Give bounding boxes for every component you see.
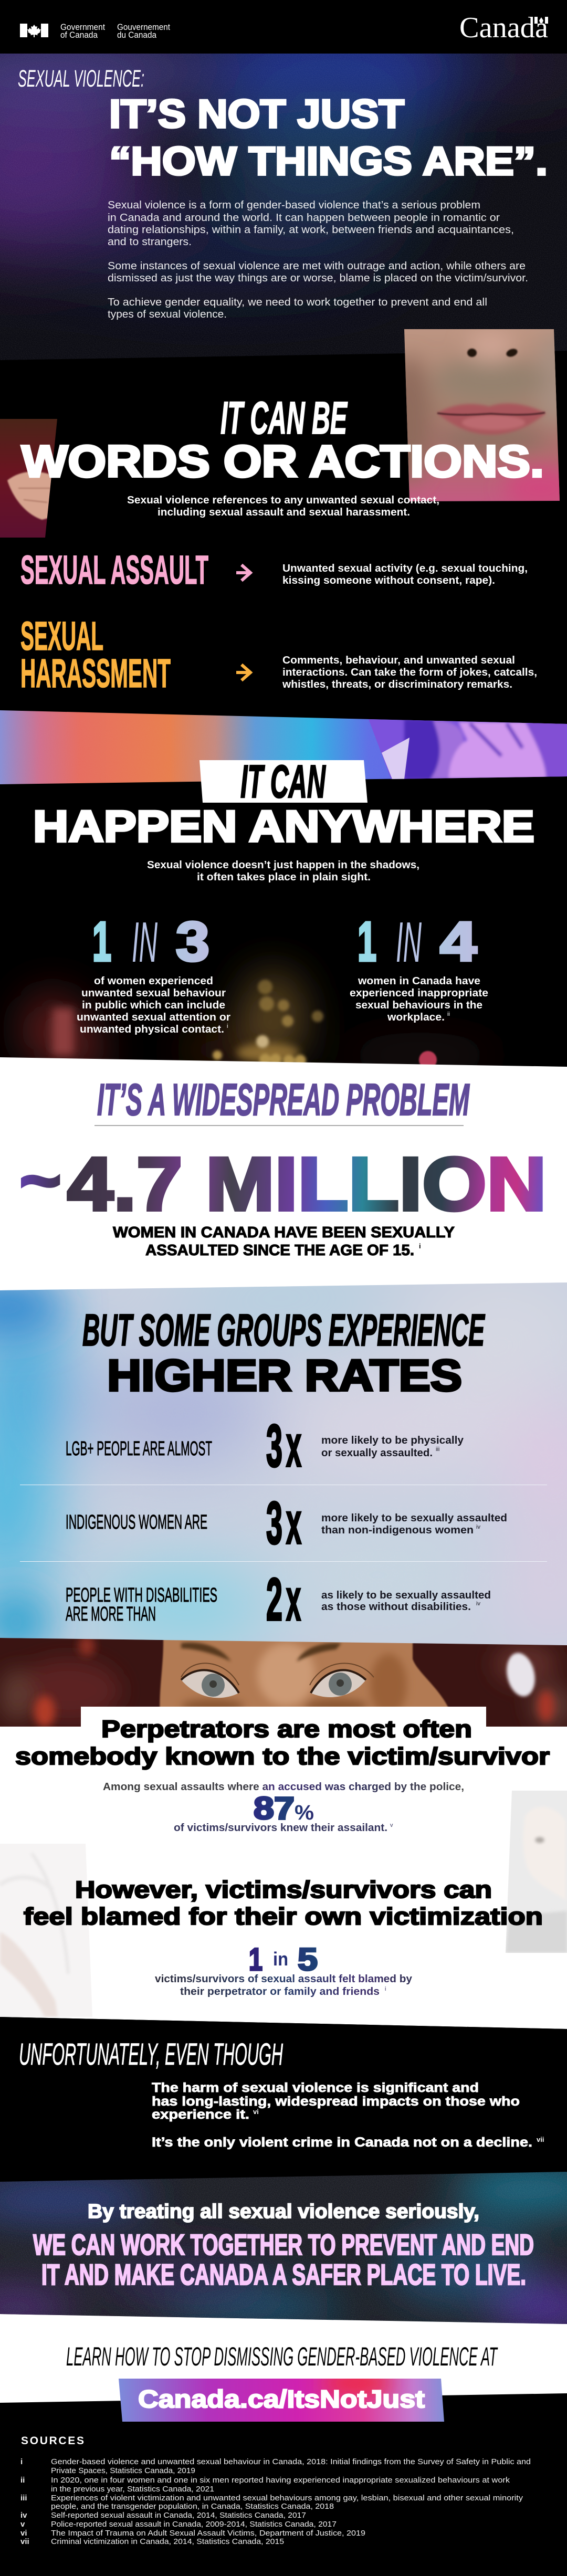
stat: 1 in 4	[350, 910, 488, 1023]
panel: white perpetrators section	[0, 1707, 567, 2029]
heading: perpetrators known to victim: Perpetrators are most often	[101, 1716, 472, 1742]
label: people with disabilities: PEOPLE WITH DISABILITIES	[66, 1584, 217, 1606]
text: women assaulted since 15: i	[419, 1242, 421, 1250]
heading: happen anywhere: HAPPEN ANYWHERE	[33, 802, 534, 851]
text: harm of sexual violence: It’s the only violent crime in Canada not on a decline.	[152, 2135, 532, 2150]
text: workplace behaviour	[350, 975, 488, 1023]
text: harm of sexual violence: The harm of sexual violence is significant and	[152, 2080, 479, 2095]
photo: woman covering face with hand	[368, 719, 567, 780]
stat: 1 in 5: in	[273, 1948, 288, 1970]
text: public behaviour: in public which can include	[82, 1000, 225, 1011]
panel: closing dark gradient	[0, 2163, 567, 2331]
definition: sexual harassment	[20, 614, 537, 696]
text: felt blamed	[155, 1973, 413, 1997]
label box: it can: IT CAN	[240, 755, 326, 807]
label: Indigenous women: INDIGENOUS WOMEN ARE	[66, 1511, 207, 1533]
label: sexual harassment	[20, 614, 171, 696]
list: sources: Gender-based violence and unwanted sexual behaviour in Canada, 2018: Initial findings from the Survey of Safety in Public and	[51, 2457, 531, 2466]
callout: work together	[33, 2228, 534, 2291]
text: more likely: iii	[436, 1446, 439, 1453]
text: more likely	[321, 1435, 464, 1459]
text: harm of sexual violence: experience it.	[152, 2107, 249, 2122]
stat: 87 percent: 87	[254, 1791, 295, 1826]
stat: 2x: 2	[266, 1566, 282, 1633]
text: more likely: iv	[476, 1524, 480, 1530]
heading: feel blamed: feel blamed for their own victimization	[24, 1903, 543, 1930]
label: people with disabilities	[66, 1584, 217, 1625]
text: women assaulted since 15: ASSAULTED SINCE THE AGE OF 15.	[145, 1242, 414, 1259]
list: sources: In 2020, one in four women and one in six men reported having experienced inappropriate sexualized behaviours at work	[51, 2476, 510, 2485]
text: assault definition: kissing someone without consent, rape).	[282, 575, 495, 586]
photo: woman in hijab	[504, 1791, 567, 1953]
text block: intro paragraphs: dating relationships, within a family, at work, between friends and acquaintances,	[108, 224, 514, 236]
label: people with disabilities: ARE MORE THAN	[66, 1603, 156, 1625]
list: sources: Police-reported sexual assault in Canada, 2009-2014, Statistics Canada, 2017	[51, 2520, 337, 2529]
row: people with disabilities: x	[286, 1567, 301, 1633]
stat: 1 in 5	[249, 1942, 318, 1977]
text: women assaulted since 15	[113, 1224, 455, 1259]
text: in plain sight: Sexual violence doesn’t just happen in the shadows,	[147, 859, 419, 871]
number: 1 in 4: IN	[396, 910, 422, 974]
heading: perpetrators known to victim: somebody known to the victim/survivor	[15, 1743, 550, 1770]
list: sources: iii	[20, 2494, 27, 2503]
logo: Canada wordmark: Canada	[459, 12, 548, 44]
panel: white call to action	[0, 2310, 567, 2403]
text: assault definition	[282, 563, 528, 586]
list: sources: iv	[20, 2511, 27, 2520]
stat: 87 percent: %	[295, 1801, 314, 1824]
text: public behaviour: unwanted sexual behaviour	[81, 987, 226, 999]
text block: intro paragraphs: and to strangers.	[108, 236, 192, 248]
text: as likely: as those without disabilities.	[321, 1601, 471, 1613]
text: harassment definition: whistles, threats, or discriminatory remarks.	[282, 679, 512, 690]
stat: 1 in 5: 5	[298, 1942, 318, 1977]
photo: eyes	[0, 1633, 567, 1727]
panel: higher rates gradient	[0, 1276, 567, 1654]
text: public behaviour: i	[227, 1023, 228, 1029]
photo: nose and mouth	[404, 329, 560, 501]
row: Indigenous women	[66, 1490, 507, 1557]
stat: 1 in 5: 1	[249, 1942, 262, 1977]
stat: 87 percent	[254, 1791, 314, 1826]
row: people with disabilities	[66, 1566, 491, 1633]
text: as likely: as likely to be sexually assaulted	[321, 1590, 491, 1601]
number: 1 in 3: 3	[176, 911, 209, 973]
text block: intro paragraphs: Sexual violence is a form of gender-based violence that’s a serious problem	[108, 199, 480, 211]
panel: government header: du Canada	[117, 30, 156, 40]
heading: higher rates: HIGHER RATES	[107, 1351, 462, 1400]
heading: sources: SOURCES	[21, 2435, 84, 2447]
text: harassment definition: interactions. Can take the form of jokes, catcalls,	[282, 667, 537, 678]
text: knew their assailant: v	[390, 1822, 393, 1828]
list: sources: people, and the transgender population, in Canada, Statistics Canada, 2018	[51, 2502, 334, 2511]
stat: 4.7 million: 4.7 MILLION	[67, 1142, 547, 1226]
heading: feel blamed: However, victims/survivors can	[75, 1876, 492, 1903]
list: sources: ii	[20, 2476, 25, 2485]
row: Indigenous women: x	[286, 1490, 301, 1556]
text block: intro paragraphs: To achieve gender equality, we need to work together to prevent and end all	[108, 297, 487, 308]
text: in plain sight	[147, 859, 419, 883]
photo: hand on red fabric	[0, 419, 58, 538]
label: sexual harassment: SEXUAL	[20, 614, 103, 659]
button: Canada.ca/ItsNotJust: Canada.ca/ItsNotJust	[138, 2385, 425, 2413]
arrow: pink	[236, 565, 250, 581]
label box: it can	[200, 755, 368, 807]
text block: intro paragraphs: types of sexual violence.	[108, 309, 227, 320]
text: by treating all sexual violence seriously: By treating all sexual violence seriously,	[88, 2201, 479, 2223]
text: workplace behaviour: women in Canada have	[358, 975, 480, 987]
text: public behaviour: of women experienced	[94, 975, 213, 987]
heading: words or actions: WORDS OR ACTIONS.	[22, 437, 544, 487]
text: more likely: than non-indigenous women	[321, 1524, 474, 1536]
label: LGB+: LGB+ PEOPLE ARE ALMOST	[66, 1438, 212, 1460]
text: public behaviour: unwanted sexual attention or	[77, 1012, 230, 1023]
text: workplace behaviour: sexual behaviours in the	[355, 1000, 482, 1011]
text: public behaviour	[77, 975, 230, 1035]
banner: colour gradient band	[0, 709, 567, 787]
text: harm of sexual violence	[152, 2080, 544, 2150]
list: sources: vii	[20, 2537, 29, 2546]
text: more likely: more likely to be physically	[321, 1435, 464, 1446]
list: sources: i	[20, 2457, 23, 2466]
heading: feel blamed	[24, 1876, 543, 1930]
text: public behaviour: unwanted physical contact.	[80, 1024, 224, 1035]
text: as likely	[321, 1590, 491, 1613]
text: definition of sexual violence: including sexual assault and sexual harassment.	[158, 507, 410, 518]
list: sources: The Impact of Trauma on Adult Sexual Assault Victims, Department of Justice, 2019	[51, 2529, 365, 2538]
text: workplace behaviour: experienced inappropriate	[350, 987, 488, 999]
list: sources: in the previous year, Statistics Canada, 2021	[51, 2485, 214, 2494]
number: 1 in 4: 1	[358, 911, 376, 973]
text: government of Canada: Government	[60, 22, 105, 32]
stat: 4.7 million: ~	[20, 1145, 61, 1216]
text: among sexual assaults: Among sexual assaults where an accused was charged by the police,	[103, 1781, 464, 1793]
text: harm of sexual violence: vi	[253, 2108, 259, 2116]
text: harm of sexual violence: has long-lasting, widespread impacts on those who	[152, 2094, 520, 2109]
eye right	[310, 1663, 374, 1697]
title: it's not just how things are	[109, 92, 548, 184]
subtitle: sexual violence: SEXUAL VIOLENCE:	[18, 65, 144, 92]
list: sources: Experiences of violent victimization and unwanted sexual behaviours among gay, lesbian, bisexual and other sexual minority	[51, 2494, 523, 2503]
stat: 3x: 3	[266, 1490, 282, 1557]
list: sources: vi	[20, 2529, 27, 2538]
heading: unfortunately even though: UNFORTUNATELY, EVEN THOUGH	[19, 2037, 283, 2072]
panel: black unfortunately section	[0, 2017, 567, 2184]
list: sources: v	[20, 2520, 25, 2529]
text: knew their assailant: of victims/survivors knew their assailant.	[174, 1822, 387, 1834]
row: LGB+ people: x	[286, 1413, 301, 1479]
label: sexual assault: SEXUAL ASSAULT	[20, 548, 208, 593]
text: more likely: more likely to be sexually assaulted	[321, 1512, 507, 1524]
stat: 1 in 3	[77, 910, 230, 1035]
text: more likely	[321, 1512, 507, 1536]
text block: intro paragraphs: in Canada and around the world. It can happen between people in romantic or	[108, 212, 500, 224]
text: felt blamed: their perpetrator or family and friends	[180, 1986, 380, 1997]
text: definition of sexual violence: Sexual violence references to any unwanted sexual contact,	[127, 495, 439, 506]
text: as likely: iv	[476, 1601, 480, 1607]
list: sources	[20, 2457, 531, 2546]
heading: perpetrators known to victim	[15, 1716, 550, 1770]
text: harassment definition: Comments, behaviour, and unwanted sexual	[282, 655, 515, 666]
eye left	[181, 1663, 239, 1698]
list: sources: Private Spaces, Statistics Canada, 2019	[51, 2466, 195, 2475]
text: in plain sight: it often takes place in plain sight.	[197, 871, 371, 883]
text: women assaulted since 15: WOMEN IN CANADA HAVE BEEN SEXUALLY	[113, 1224, 455, 1241]
text: workplace behaviour: ii	[447, 1011, 450, 1017]
panel: government header	[20, 12, 548, 44]
text: harm of sexual violence: vii	[537, 2136, 544, 2143]
heading: it can be: IT CAN BE	[220, 393, 348, 444]
button: Canada.ca/ItsNotJust	[116, 2372, 446, 2423]
panel: government header: of Canada	[60, 30, 98, 40]
panel: white widespread problem section	[0, 1057, 567, 1297]
text: felt blamed: victims/survivors of sexual assault felt blamed by	[155, 1973, 413, 1985]
photo: blurred street lights	[21, 971, 499, 1069]
text: definition of sexual violence	[127, 495, 439, 518]
photo: bedsheets and arm	[0, 1844, 92, 2017]
label: sexual harassment: HARASSMENT	[20, 651, 171, 696]
text: more likely: or sexually assaulted.	[321, 1447, 433, 1459]
text block: intro paragraphs: dismissed as just the way things are or worse, blame is placed on the victim/survivor.	[108, 272, 528, 284]
panel: intro dark gradient	[0, 54, 567, 360]
row: LGB+ people	[66, 1413, 464, 1479]
number: 1 in 3: 1	[92, 911, 111, 973]
text: gouvernement du Canada: Gouvernement	[117, 22, 170, 32]
title: it's not just how things are: “HOW THINGS ARE”.	[109, 139, 548, 184]
text block: intro paragraphs: Some instances of sexual violence are met with outrage and action, while others are	[108, 260, 526, 272]
list: sources: Self-reported sexual assault in Canada, 2014, Statistics Canada, 2017	[51, 2511, 306, 2520]
text: assault definition: Unwanted sexual activity (e.g. sexual touching,	[282, 563, 528, 574]
text: workplace behaviour: workplace.	[387, 1012, 445, 1023]
icon: government of Canada flag	[20, 24, 48, 37]
text block: intro paragraphs	[108, 199, 528, 320]
number: 1 in 3	[92, 910, 209, 974]
list: sources: Criminal victimization in Canada, 2014, Statistics Canada, 2015	[51, 2537, 284, 2546]
definition: sexual assault	[20, 548, 528, 593]
number: 1 in 3: IN	[132, 910, 158, 974]
number: 1 in 4: 4	[440, 911, 477, 973]
text: harassment definition	[282, 655, 537, 690]
stat: 3x: 3	[266, 1413, 282, 1479]
number: 1 in 4	[358, 910, 477, 974]
title: it's not just how things are: IT’S NOT JUST	[109, 92, 404, 136]
text: felt blamed: i	[385, 1986, 386, 1992]
arrow: orange	[236, 665, 250, 680]
